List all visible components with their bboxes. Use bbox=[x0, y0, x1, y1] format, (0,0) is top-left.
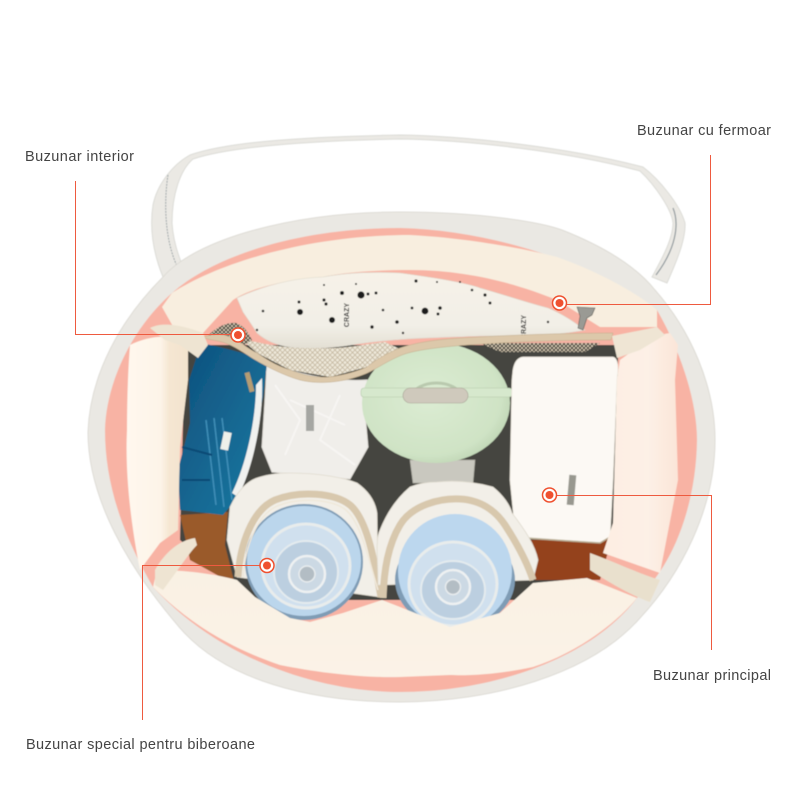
pouch brand text: CRAZY bbox=[344, 303, 351, 327]
pink lining bbox=[105, 228, 697, 692]
callout: Buzunar special pentru biberoane: Buzunar special pentru biberoane bbox=[26, 737, 255, 753]
orange lining glimpse: left bbox=[180, 512, 235, 585]
white crinkled pouch bbox=[262, 363, 368, 479]
drawstring: bottom left bbox=[155, 538, 197, 590]
white box pouch bbox=[510, 357, 618, 543]
zip pocket: speckled pouch: CRAZY bbox=[521, 315, 528, 339]
mesh inner pocket bbox=[203, 323, 613, 382]
drawstring: top left bbox=[150, 325, 208, 358]
callout: Buzunar interior: Buzunar interior bbox=[25, 149, 134, 165]
dark interior bbox=[180, 345, 618, 600]
right lining fold bbox=[603, 333, 678, 573]
callout: Buzunar principal: Buzunar principal bbox=[653, 668, 771, 684]
right bottle pocket bbox=[377, 481, 538, 629]
left lining fold bbox=[127, 337, 188, 570]
left bottle pocket bbox=[227, 473, 381, 620]
pouch speckles bbox=[256, 279, 549, 334]
left bottle bbox=[245, 504, 363, 620]
neck bbox=[410, 460, 475, 483]
callout: Buzunar special pentru biberoane bbox=[26, 558, 274, 753]
orange lining glimpse: right bbox=[530, 538, 612, 580]
blue pouch bbox=[178, 343, 267, 515]
drawstring: top right bbox=[612, 327, 665, 358]
callout: Buzunar cu fermoar: Buzunar cu fermoar bbox=[637, 123, 771, 139]
zip pocket: speckled pouch bbox=[237, 272, 585, 348]
back flap bbox=[162, 235, 657, 333]
callout: Buzunar interior bbox=[25, 149, 245, 342]
green bottle cap bbox=[361, 343, 512, 483]
front flap bbox=[153, 570, 637, 677]
callout: Buzunar principal bbox=[542, 488, 771, 684]
zipper pull bbox=[577, 307, 595, 330]
right bottle bbox=[395, 514, 515, 629]
drawstring: bottom right bbox=[590, 553, 660, 602]
bag outer shell bbox=[88, 212, 715, 702]
bag handle bbox=[152, 135, 685, 283]
callout: Buzunar cu fermoar bbox=[552, 123, 771, 310]
bag illustration bbox=[88, 135, 715, 702]
